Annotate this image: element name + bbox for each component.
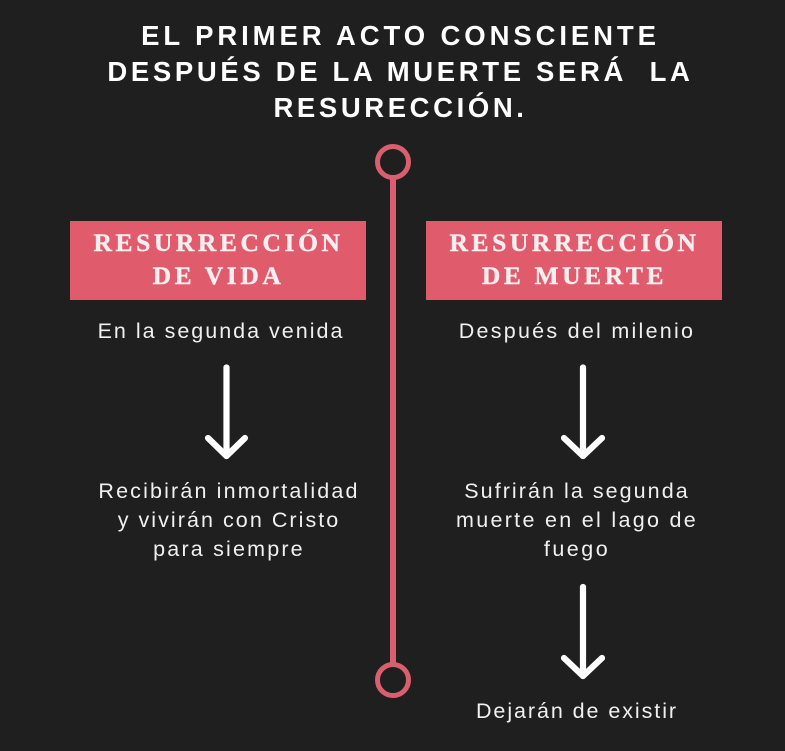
panel: resurrección de muerte: RESURRECCIÓN xyxy=(449,228,700,257)
panel: resurrección de vida xyxy=(70,221,366,300)
text: después del milenio: Después del milenio xyxy=(459,319,695,343)
title xyxy=(107,20,694,123)
text: recibirán inmortalidad: y vivirán con Cristo xyxy=(118,508,340,532)
text: sufrirán la segunda muerte: muerte en el lago de xyxy=(456,508,698,532)
text: recibirán inmortalidad: Recibirán inmortalidad xyxy=(98,479,360,503)
text: recibirán inmortalidad xyxy=(98,479,360,561)
panel: resurrección de vida: RESURRECCIÓN xyxy=(93,228,344,257)
title: EL PRIMER ACTO CONSCIENTE xyxy=(141,20,660,51)
title: DESPUÉS DE LA MUERTE SERÁ LA xyxy=(107,56,694,87)
text: sufrirán la segunda muerte: Sufrirán la segunda xyxy=(464,479,690,503)
text: sufrirán la segunda muerte: fuego xyxy=(544,537,610,561)
title: RESURECCIÓN. xyxy=(273,92,528,123)
icon: arrow left xyxy=(204,364,248,460)
text: dejarán de existir: Dejarán de existir xyxy=(476,699,678,723)
panel: resurrección de muerte: DE MUERTE xyxy=(482,261,667,290)
panel: resurrección de vida: DE VIDA xyxy=(153,261,284,290)
text: en la segunda venida: En la segunda venida xyxy=(98,319,344,343)
icon: arrow right lower xyxy=(560,584,606,680)
text: recibirán inmortalidad: para siempre xyxy=(153,537,305,561)
icon: arrow right upper xyxy=(560,364,606,460)
text: sufrirán la segunda muerte xyxy=(456,479,698,561)
panel: resurrección de muerte xyxy=(426,221,722,300)
central timeline xyxy=(375,144,411,698)
